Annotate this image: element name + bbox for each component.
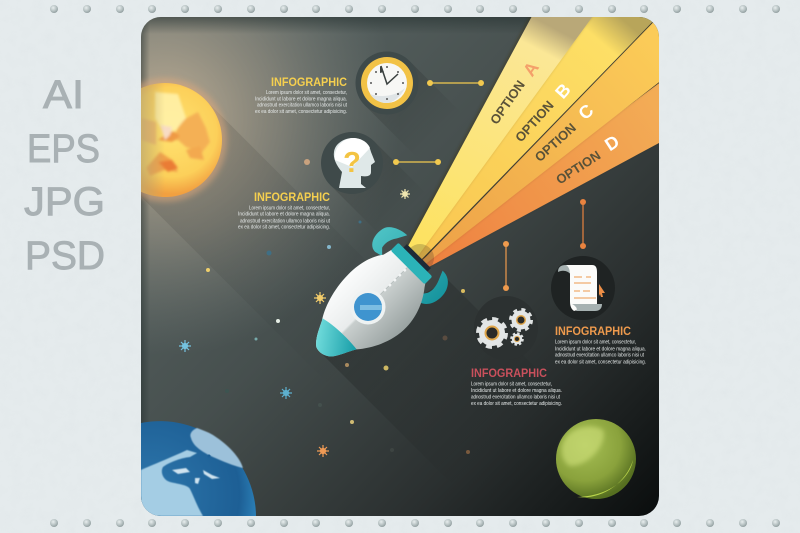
rocket nose cone [316, 318, 356, 356]
rivets along bottom edge [50, 519, 780, 527]
rocket nozzle [404, 244, 431, 272]
rocket fins [372, 227, 448, 304]
text block: head: Incididunt ut labore et dolore magna aliqua. [238, 212, 330, 218]
text block: scroll [555, 324, 646, 365]
text block: scroll: ex ea dolor sit amet, consectetur adipisicing. [555, 359, 646, 365]
rocket body [316, 250, 426, 356]
clock icon long shadow [387, 83, 445, 141]
option beams [406, 17, 659, 267]
text block: gears [471, 366, 562, 407]
rivets along top edge [50, 5, 780, 13]
format labels: AI EPS JPG PSD: JPG [24, 180, 105, 224]
panel: dark space scene [141, 17, 659, 516]
text block: clock: Incididunt ut labore et dolore magna aliqua. [255, 96, 347, 102]
text block: scroll: Incididunt ut labore et dolore magna aliqua. [555, 346, 646, 352]
text block: gears: Incididunt ut labore et dolore magna aliqua. [471, 388, 562, 394]
text block: gears: ex ea dolor sit amet, consectetur adipisicing. [471, 401, 562, 407]
beam: option C: C [574, 100, 598, 124]
clock icon [356, 52, 418, 114]
beam: option D: OPTION [553, 148, 603, 187]
connector: clock [427, 80, 484, 86]
text block: scroll: Lorem ipsum dolor sit amet, consectetur, [555, 340, 636, 346]
green planet [556, 419, 636, 499]
sun [141, 76, 230, 204]
text block: head [238, 190, 331, 231]
connector: scroll [580, 199, 586, 249]
text block: scroll: adnostrud exercitation ullamco laboris nisi ut [555, 353, 645, 359]
beam: option A: A [519, 58, 543, 80]
text block: head: Lorem ipsum dolor sit amet, consectetur, [249, 205, 330, 211]
document scroll icon [551, 256, 615, 320]
beam: option D [419, 75, 670, 268]
beam: option B: B [551, 79, 575, 103]
head with question mark icon: ? [343, 147, 361, 179]
beam: option A: OPTION [487, 78, 528, 127]
rocket seam and rivets [380, 267, 408, 295]
text block: head: adnostrud exercitation ullamco laboris nisi ut [240, 218, 331, 224]
format labels: AI EPS JPG PSD: PSD [25, 234, 105, 278]
text block: clock: INFOGRAPHIC [271, 75, 347, 89]
head with question mark icon [321, 132, 375, 194]
head icon long shadow [352, 163, 410, 221]
stars [179, 159, 470, 457]
text block: gears: Lorem ipsum dolor sit amet, consectetur, [471, 382, 552, 388]
format labels: AI EPS JPG PSD [24, 73, 105, 278]
connector: head [393, 159, 441, 165]
rocket window [354, 293, 386, 324]
beam: option B: OPTION [512, 98, 557, 145]
beam: option C: OPTION [532, 120, 579, 165]
rocket long shadow [323, 280, 464, 397]
text block: head: ex ea dolor sit amet, consectetur adipisicing. [238, 225, 330, 231]
rocket [316, 227, 448, 356]
earth planet [141, 421, 256, 516]
text block: clock: Lorem ipsum dolor sit amet, consectetur, [266, 90, 347, 96]
text block: scroll: INFOGRAPHIC [555, 324, 631, 338]
text block: clock: ex ea dolor sit amet, consectetur adipisicing. [255, 109, 347, 115]
beam: option A [407, 5, 601, 260]
text block: gears: INFOGRAPHIC [471, 366, 547, 380]
beam: option D: D [601, 131, 623, 155]
text block: gears: adnostrud exercitation ullamco laboris nisi ut [471, 395, 561, 401]
text block: head: INFOGRAPHIC [254, 190, 330, 204]
beam: option B [418, 17, 652, 259]
format labels: AI EPS JPG PSD: EPS [27, 127, 100, 171]
gears icon [476, 296, 533, 349]
connector: gears [503, 241, 509, 291]
text block: clock [255, 75, 348, 115]
text block: clock: adnostrud exercitation ullamco laboris nisi ut [257, 103, 348, 109]
format labels: AI EPS JPG PSD: AI [43, 73, 84, 117]
rocket tail band [391, 243, 432, 284]
sun long shadow [143, 106, 288, 259]
beam: option C [422, 22, 659, 264]
